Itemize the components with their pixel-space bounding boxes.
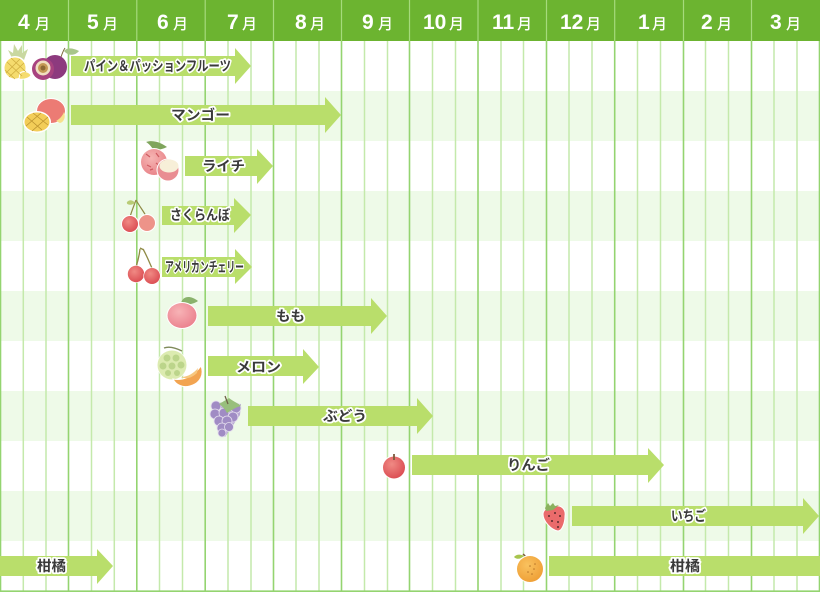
arrow: ぶどう [248, 398, 433, 434]
month header bar: 月 [586, 13, 601, 34]
icon: melon [157, 347, 202, 387]
icon: cherry [121, 200, 156, 233]
month header bar: 5 [87, 11, 99, 34]
arrow: アメリカンチェリー [162, 249, 252, 284]
arrow: アメリカンチェリー: アメリカンチェリー [165, 257, 244, 277]
arrow: さくらんぼ: さくらんぼ [170, 205, 230, 225]
arrow: 柑橘 (4月から) [0, 549, 113, 584]
arrow: もも: もも [276, 306, 305, 326]
arrow: 柑橘 (11月から): 柑橘 [670, 556, 700, 576]
icon: mango [23, 98, 66, 133]
arrow: メロン: メロン [236, 357, 281, 377]
month header bar [0, 0, 820, 41]
month header bar: 4 [18, 11, 30, 34]
month header bar: 1 [638, 11, 650, 34]
arrow: ぶどう: ぶどう [323, 406, 367, 426]
month header bar: 7 [227, 11, 239, 34]
month header bar: 月 [717, 13, 732, 34]
arrow: いちご [572, 498, 819, 534]
arrow: マンゴー: マンゴー [171, 105, 230, 125]
icon: strawberry [543, 503, 565, 531]
month header bar: 月 [103, 13, 118, 34]
month header bar: 月 [310, 13, 325, 34]
icon: passion fruit [32, 48, 79, 80]
arrow: いちご: いちご [671, 506, 706, 526]
arrow: パイン＆パッションフルーツ [71, 48, 251, 84]
month header bar: 月 [449, 13, 464, 34]
arrow: 柑橘 (4月から): 柑橘 [37, 556, 66, 576]
month header bar: 月 [652, 13, 667, 34]
month header bar: 8 [295, 11, 307, 34]
icon: peach [166, 297, 198, 329]
icon: lychee [140, 141, 180, 182]
arrow: ライチ [185, 149, 273, 184]
icon: american cherry [127, 248, 161, 285]
alternating row bands [0, 91, 820, 541]
arrow: パイン＆パッションフルーツ: パイン＆パッションフルーツ [84, 56, 231, 76]
month header bar: 2 [701, 11, 713, 34]
month header bar: 10 [423, 11, 446, 34]
month header bar: 月 [786, 13, 801, 34]
icon: apple [382, 454, 406, 480]
arrow: りんご: りんご [507, 455, 550, 475]
arrow: ライチ: ライチ [202, 156, 245, 176]
icon: grapes [210, 396, 241, 437]
month header bar: 月 [173, 13, 188, 34]
month header bar: 12 [560, 11, 583, 34]
arrow: マンゴー [71, 97, 341, 133]
icon: pineapple [3, 44, 31, 80]
arrow: さくらんぼ [162, 198, 251, 233]
month header bar: 月 [35, 13, 50, 34]
month header bar: 6 [157, 11, 169, 34]
month header bar: 月 [242, 13, 257, 34]
month header bar: 9 [362, 11, 374, 34]
arrow: りんご [412, 448, 664, 483]
month header bar: 月 [517, 13, 532, 34]
icon: mandarin orange [514, 554, 544, 583]
month header bar: 3 [770, 11, 782, 34]
arrow: もも [208, 298, 387, 334]
arrow: メロン [208, 349, 319, 384]
month header bar: 11 [492, 11, 515, 34]
arrow: 柑橘 (11月から) [549, 556, 820, 576]
month header bar: 月 [378, 13, 393, 34]
